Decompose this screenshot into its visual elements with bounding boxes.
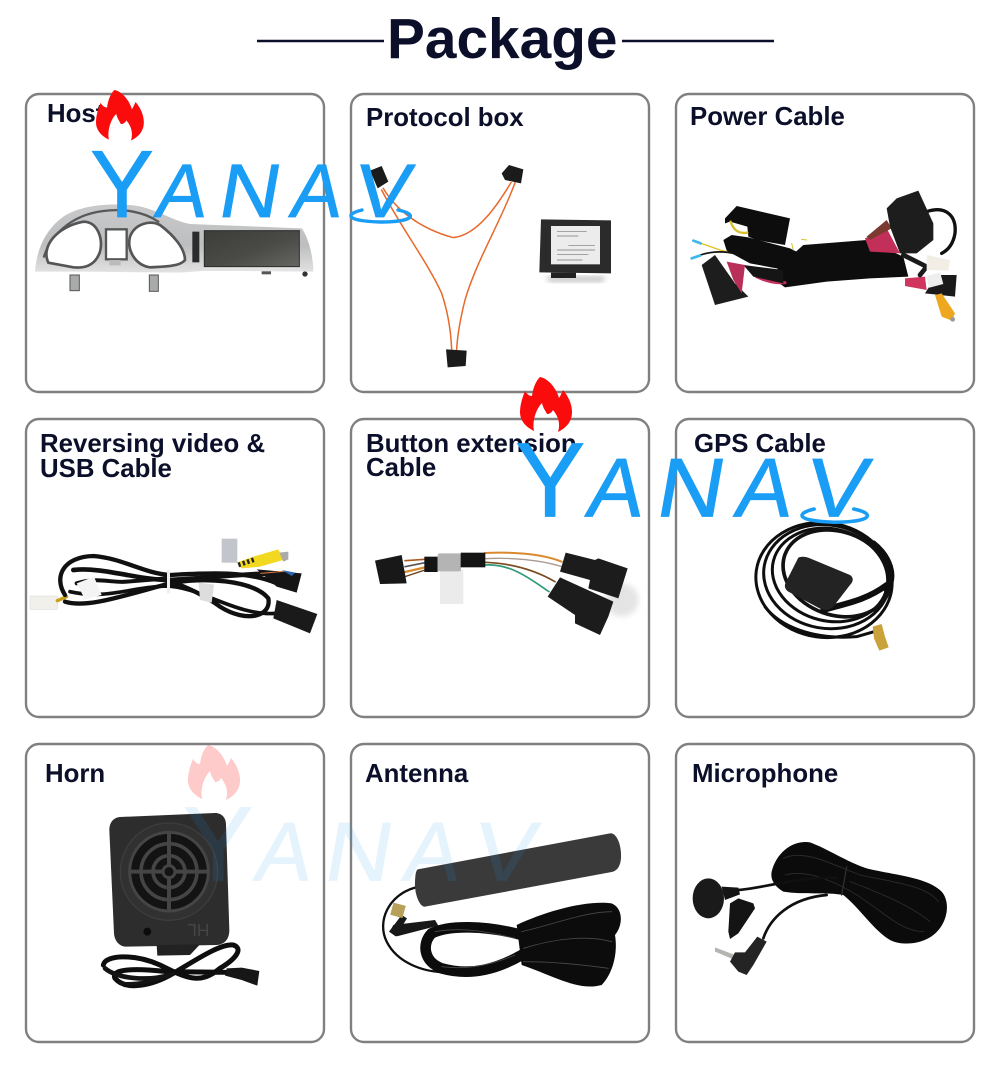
label: Button extension Cable (366, 430, 577, 482)
label: Host: Host (47, 100, 105, 128)
watermark: YANAV faded, bottom: Y (183, 786, 253, 904)
image: power wiring harness (692, 191, 957, 322)
label: Power Cable: Power Cable (690, 103, 845, 131)
image: fibre cables and protocol box (370, 165, 611, 367)
label: Reversing video & USB Cable (40, 430, 265, 483)
watermark: YANAV faded, bottom: N (318, 805, 401, 899)
image: video and USB cable (30, 539, 317, 633)
panel: Antenna (351, 744, 649, 1042)
watermark: YANAV top: N (213, 149, 288, 234)
panel: Reversing video & USB Cable (26, 419, 324, 717)
title: Package: Package (387, 8, 618, 71)
panel: Button extension Cable (351, 419, 649, 717)
watermark: YANAV middle: V (800, 441, 877, 535)
watermark: YANAV middle: Y (515, 422, 585, 540)
panel: Host (26, 94, 324, 392)
label: Reversing video & USB Cable: Reversing video & (40, 430, 265, 458)
image: dashboard host unit (35, 205, 313, 291)
watermark: YANAV middle: N (650, 441, 733, 535)
watermark: YANAV top: V (349, 149, 419, 234)
watermark: YANAV top: A (150, 149, 214, 234)
watermark: YANAV middle: A (581, 441, 652, 535)
label: Microphone: Microphone (692, 760, 838, 788)
label: GPS Cable: GPS Cable (694, 430, 826, 458)
watermark: YANAV top: Y (90, 131, 154, 238)
watermark: YANAV faded, bottom (183, 786, 545, 904)
image: GPS antenna (748, 514, 903, 651)
label: Protocol box: Protocol box (366, 104, 524, 132)
watermark: flame red, middle (520, 377, 572, 432)
panel: GPS Cable (676, 419, 974, 717)
watermark: YANAV faded, bottom: A (398, 805, 469, 899)
label: Horn: Horn (45, 760, 105, 788)
watermark: YANAV top (90, 131, 419, 238)
panel: Power Cable (676, 94, 974, 392)
image: horn speaker: HL (187, 920, 209, 940)
image: antenna with coiled cable (383, 833, 621, 987)
label: Button extension Cable: Button extension (366, 430, 577, 458)
watermark: YANAV middle (515, 422, 877, 540)
watermark: flame red, top (96, 90, 144, 141)
panel: Protocol box (351, 94, 649, 392)
label: Antenna: Antenna (365, 760, 469, 788)
watermark: YANAV faded, bottom: A (249, 805, 320, 899)
watermark: flame faded, bottom (188, 745, 240, 800)
label: Button extension Cable: Cable (366, 454, 436, 482)
label: Reversing video & USB Cable: USB Cable (40, 455, 172, 483)
image: horn speaker (103, 813, 259, 986)
watermark: YANAV middle: A (730, 441, 801, 535)
watermark: YANAV faded, bottom: V (468, 805, 545, 899)
panel: Microphone (676, 744, 974, 1042)
image: button extension cable (375, 553, 638, 635)
watermark: YANAV top: A (285, 149, 349, 234)
panel: Horn (26, 744, 324, 1042)
image: clip microphone with cable (693, 842, 947, 975)
